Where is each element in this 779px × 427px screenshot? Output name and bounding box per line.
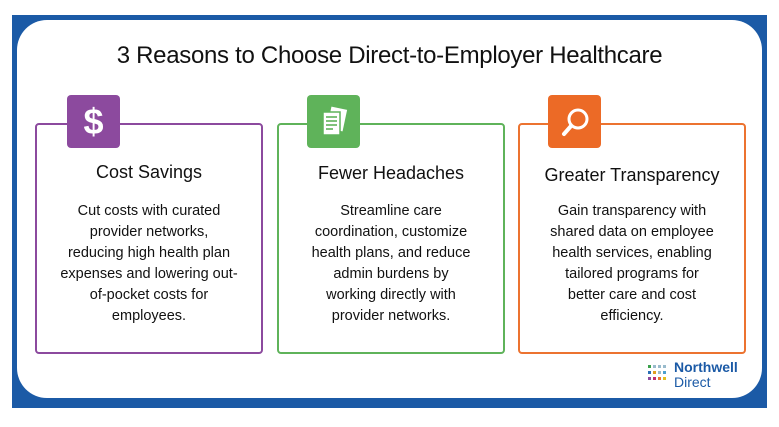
text: health plans, and reduce [312,245,470,261]
title: 3 Reasons to Choose Direct-to-Employer Healthcare [117,42,662,69]
heading: Cost Savings [96,162,202,182]
text: employees. [112,308,186,324]
heading: Greater Transparency [544,165,720,185]
text: tailored programs for [565,266,699,282]
text: efficiency. [600,308,664,324]
text [312,203,470,324]
icon: dollar [67,95,120,148]
text [60,203,238,324]
logo: Northwell [674,359,738,375]
text [550,203,714,324]
logo: Direct [674,374,711,390]
panel: transparency [518,123,746,354]
text: better care and cost [568,287,696,303]
icon: dollar: $ [83,100,104,142]
text: provider networks, [90,224,208,240]
text: Cut costs with curated [78,203,220,219]
text: expenses and lowering out- [60,266,238,282]
text: working directly with [326,287,456,303]
text: reducing high health plan [68,245,230,261]
text: of-pocket costs for [90,287,208,303]
icon: magnifier [548,95,601,148]
text: coordination, customize [315,224,467,240]
text: admin burdens by [333,266,449,282]
panel: cost savings [35,123,263,354]
text: Gain transparency with [558,203,706,219]
text: Streamline care [340,203,442,219]
text: provider networks. [332,308,450,324]
text: shared data on employee [550,224,714,240]
panel: fewer headaches [277,123,505,354]
icon: documents [307,95,360,148]
logo [648,359,738,390]
heading: Fewer Headaches [318,163,464,183]
text: health services, enabling [552,245,712,261]
